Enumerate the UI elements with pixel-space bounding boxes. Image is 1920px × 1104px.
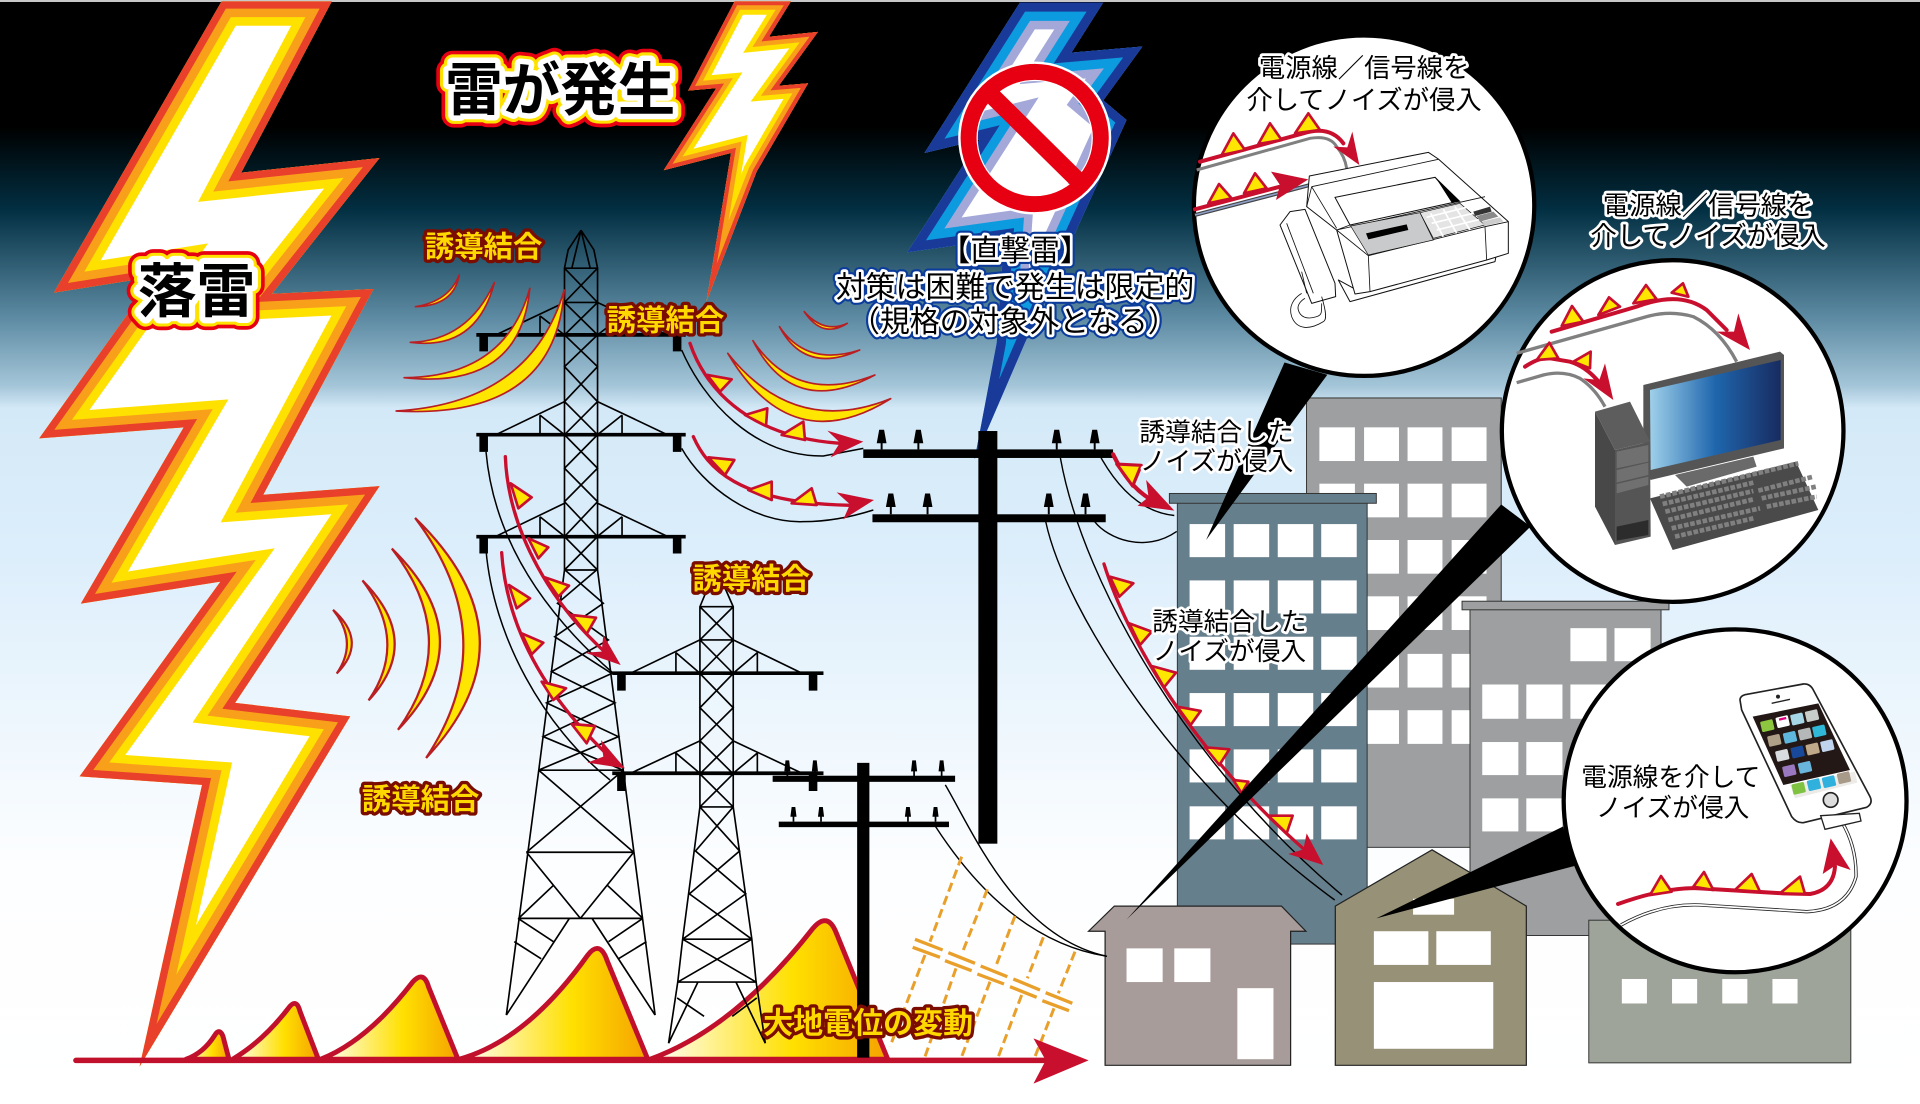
heading: 雷が発生: 雷が発生 bbox=[445, 59, 675, 123]
transmission tower: large bbox=[476, 230, 686, 1015]
callout pointer: computer bbox=[1127, 504, 1531, 920]
callout pointer: smartphone bbox=[1376, 827, 1575, 918]
noise arrow: left lower bbox=[502, 553, 625, 768]
text: computer callout: 電源線／信号線を bbox=[1603, 190, 1813, 220]
text: fax callout bbox=[1246, 53, 1482, 115]
icon: desktop computer bbox=[1517, 283, 1818, 550]
noise arrow: long along building bbox=[1104, 564, 1323, 865]
waves: right of tower bbox=[728, 312, 891, 421]
transmission tower: small bbox=[612, 588, 823, 1043]
noise arrow: pole to building bbox=[1113, 454, 1174, 511]
label: inductive coupling small tower: 誘導結合 bbox=[692, 563, 810, 596]
text: direct lightning note: （規格の対象外となる） bbox=[850, 306, 1178, 339]
text: noise entry upper: ノイズが侵入 bbox=[1140, 447, 1293, 476]
utility pole: small bbox=[773, 760, 955, 1058]
noise arrow: second right arm bbox=[693, 437, 874, 519]
building: front blue-grey bbox=[1169, 493, 1376, 944]
callout circle: smartphone bbox=[1564, 629, 1907, 972]
noise arrow: upper right arm bbox=[690, 343, 863, 457]
text: smartphone callout: 電源線を介して bbox=[1581, 763, 1760, 792]
building: right grey bbox=[1462, 601, 1669, 936]
text: noise entry upper: 誘導結合した bbox=[1139, 418, 1294, 447]
label: inductive coupling near bolt: 誘導結合 bbox=[362, 783, 479, 816]
small lightning bolt bbox=[664, 1, 818, 301]
waves: left of tower bbox=[396, 275, 564, 412]
text: smartphone callout bbox=[1581, 763, 1760, 823]
label: 落雷: 落雷 bbox=[138, 260, 255, 325]
text: noise entry lower: ノイズが侵入 bbox=[1153, 637, 1306, 666]
waves: right of big bolt bbox=[333, 518, 480, 758]
text: direct lightning note: 【直撃雷】 bbox=[940, 235, 1090, 268]
label: 落雷: 落雷 bbox=[138, 260, 255, 325]
utility pole: large bbox=[863, 430, 1113, 844]
direct lightning bolt (blue) bbox=[907, 2, 1142, 459]
text: direct lightning note: （規格の対象外となる） bbox=[850, 306, 1178, 339]
tower power lines and waves bbox=[396, 275, 891, 421]
building: low grey-green bbox=[1589, 920, 1851, 1063]
noise arrow: left upper bbox=[505, 457, 621, 665]
callout circle: fax bbox=[1194, 36, 1534, 376]
text: fax callout: 電源線／信号線を bbox=[1259, 53, 1469, 83]
text: direct lightning note bbox=[836, 235, 1194, 339]
text: direct lightning note: 【直撃雷】 bbox=[940, 235, 1090, 268]
ground axis arrow bbox=[76, 1038, 1089, 1084]
icon: prohibition sign bbox=[968, 71, 1101, 205]
big lightning bolt bbox=[39, 1, 380, 1067]
label: 落雷: 落雷 bbox=[138, 260, 255, 325]
power lines from tower arms bbox=[486, 350, 873, 780]
text: direct lightning note: 対策は困難で発生は限定的 bbox=[836, 272, 1194, 305]
text: noise entry lower: 誘導結合した bbox=[1152, 608, 1307, 637]
heading: 雷が発生: 雷が発生 bbox=[445, 59, 675, 123]
icon: fax machine bbox=[1195, 113, 1508, 327]
text: noise entry lower bbox=[1152, 608, 1307, 666]
heading: 雷が発生: 雷が発生 bbox=[445, 59, 675, 123]
noise arrows around large tower bbox=[486, 343, 874, 780]
text: noise entry upper bbox=[1139, 418, 1294, 476]
text: computer callout bbox=[1591, 190, 1826, 251]
power lines: poles to buildings bbox=[936, 451, 1342, 956]
text: direct lightning note: 対策は困難で発生は限定的 bbox=[836, 272, 1194, 305]
ground potential peaks bbox=[186, 921, 888, 1059]
building: house brown bbox=[1089, 906, 1306, 1065]
icon: smartphone bbox=[1618, 684, 1871, 925]
label: ground potential change: 大地電位の変動 bbox=[763, 1007, 973, 1040]
text: fax callout: 介してノイズが侵入 bbox=[1246, 85, 1482, 115]
building: house olive bbox=[1335, 850, 1526, 1065]
building: back grey bbox=[1307, 398, 1501, 847]
text: smartphone callout: ノイズが侵入 bbox=[1596, 794, 1749, 823]
orange dashed ground grid bbox=[890, 857, 1075, 1057]
callout pointer: fax bbox=[1206, 362, 1327, 540]
label: inductive coupling right of tower: 誘導結合 bbox=[607, 305, 724, 338]
callout circle: computer bbox=[1502, 260, 1843, 602]
label: inductive coupling top: 誘導結合 bbox=[425, 231, 542, 264]
text: computer callout: 介してノイズが侵入 bbox=[1591, 221, 1826, 251]
